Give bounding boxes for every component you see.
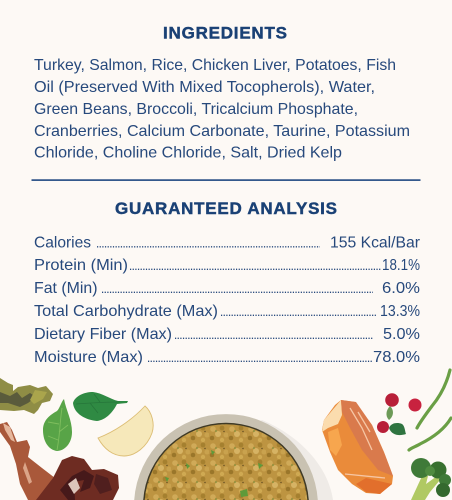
row: protein: 18.1% [382,257,420,274]
icon: spinach leaf upright [43,399,72,451]
ingredients text block: Chloride, Choline Chloride, Salt, Dried Kelp [34,144,342,162]
row: total carbohydrate: Total Carbohydrate (Max) [34,303,218,320]
row: calories: 155 Kcal/Bar [330,234,420,252]
row: moisture: Moisture (Max) [34,349,143,366]
row: dietary fiber: 5.0% [383,326,420,343]
icon: salmon fillet [322,400,393,494]
row: calories: Calories [34,234,91,252]
row: total carbohydrate: 13.3% [380,303,420,320]
ingredients text block [34,57,410,162]
icon: bowl shadow [250,420,333,500]
row: fat [34,280,420,297]
illustration: food ingredients [0,370,451,500]
row: calories [34,234,420,252]
row: moisture [34,349,420,366]
row: fat: Fat (Min) [34,280,98,297]
heading: guaranteed analysis: GUARANTEED ANALYSIS [115,199,337,218]
icon: roasted turkey leg [0,422,119,500]
ingredients text block: Green Beans, Broccoli, Tricalcium Phosphate, [34,101,358,118]
icon: kelp [0,378,53,414]
row: protein: Protein (Min) [34,257,128,274]
row: dietary fiber [34,326,420,343]
ingredients text block: Turkey, Salmon, Rice, Chicken Liver, Potatoes, Fish [34,57,396,74]
icon: spinach leaf horizontal [73,392,128,421]
row: total carbohydrate [34,303,420,320]
icon: cranberries and leaves [377,393,422,435]
row: dietary fiber: Dietary Fiber (Max) [34,326,172,343]
row: fat: 6.0% [382,280,420,297]
icon: green beans [409,370,451,450]
icon: broccoli [411,458,451,500]
row: protein [34,257,420,274]
icon: bowl of food [134,414,318,500]
heading: ingredients: INGREDIENTS [163,24,287,42]
guaranteed analysis table [34,234,420,366]
ingredients text block: Cranberries, Calcium Carbonate, Taurine, Potassium [34,123,410,140]
row: moisture: 78.0% [373,349,420,366]
ingredients text block: Oil (Preserved With Mixed Tocopherols), Water, [34,79,375,96]
icon: potato wedge [98,406,153,456]
